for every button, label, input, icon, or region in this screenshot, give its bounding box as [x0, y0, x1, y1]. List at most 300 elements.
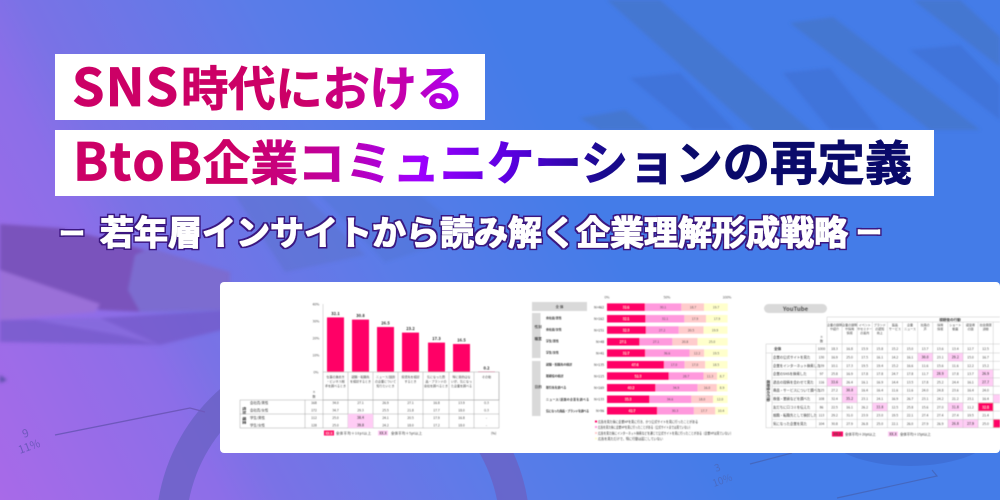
table values: 17.8	[861, 371, 868, 376]
table values: 26.8	[861, 421, 868, 426]
table values: 116	[819, 379, 824, 384]
table values: 13.7	[967, 371, 974, 376]
table values: 23.1	[922, 396, 929, 401]
stacked rows: N=151	[594, 327, 604, 332]
table legend: XX.X	[326, 430, 332, 436]
table rows: 27.1	[357, 400, 364, 405]
category labels	[312, 374, 491, 398]
stacked rows: N=462	[594, 304, 604, 309]
table values: 16.4	[967, 388, 974, 393]
table values: 113	[819, 413, 824, 418]
stacked rows: N=115	[594, 373, 604, 378]
table legend: 全体平均＋5pt以上	[391, 430, 423, 436]
column heading: 採用	[937, 322, 943, 327]
table values: 16.1	[907, 354, 913, 360]
row labels: 株価・業績などを調べた	[773, 396, 811, 401]
table grid	[766, 317, 1000, 428]
percent axis: 100%	[723, 294, 731, 300]
table values: 17.8	[907, 371, 913, 376]
stacked rows: 学生/男性	[546, 338, 559, 343]
bar value labels: 26.5	[381, 320, 390, 326]
table values: 16.8	[846, 346, 853, 351]
table values: 13.7	[922, 346, 929, 351]
category labels: 特に目的はな	[452, 374, 471, 379]
stacked rows: ニュース/話題の企業を調べる	[546, 396, 589, 402]
table values: 24.4	[952, 379, 959, 384]
column heading: 製品	[892, 322, 898, 327]
table legend: XX.X	[379, 430, 388, 436]
category labels: 就職・転職先	[351, 374, 370, 379]
table rows: 25.5	[382, 408, 389, 412]
table values: 24.8	[937, 388, 944, 393]
table values: 18.3	[831, 346, 838, 351]
table values: 12.2	[967, 363, 974, 368]
stacked rows: 36.6	[664, 350, 670, 355]
table values: 24.7	[892, 371, 898, 376]
table rows: 34.7	[332, 408, 339, 412]
stacked rows: N=96	[596, 408, 604, 413]
category labels: 知りたいとき	[376, 383, 395, 388]
white report panel	[220, 282, 1000, 453]
stacked rows: 31.7	[623, 350, 629, 355]
stacked rows: 28.7	[683, 373, 689, 378]
table values: 1000	[818, 346, 825, 351]
table values: 32.4	[831, 396, 838, 401]
table values: 16.1	[967, 379, 974, 384]
stacked rows: 就職・転職先の検討	[546, 362, 572, 366]
table grid	[240, 372, 499, 428]
table rows: 39.8	[357, 422, 364, 428]
y axis and labels: 0%	[313, 370, 319, 374]
category labels: 品・ブランドの	[425, 378, 447, 384]
stacked chart legend: 広告を見ただけで、特に行動は起こしていない	[598, 436, 664, 441]
stacked rows: 32.1	[623, 316, 629, 321]
group label text: 職業	[534, 336, 542, 342]
table rows: -	[486, 422, 488, 428]
stacked bar chart: action by purpose	[532, 294, 733, 441]
table values: 10.1	[831, 363, 838, 368]
stacked rows: 12.0	[717, 396, 723, 402]
table legend	[324, 430, 496, 436]
category labels: 仕事の進め方	[326, 374, 345, 379]
category labels: 投資先を検討	[401, 374, 420, 379]
stacked rows: 17.0	[671, 362, 677, 367]
heat table legend	[832, 432, 931, 436]
column heading: やセミナー	[857, 326, 872, 331]
column heading: n	[821, 335, 823, 339]
table highlights	[348, 414, 373, 428]
table values: 31.8	[952, 404, 959, 409]
YouTube pill heading: YouTube	[782, 304, 809, 313]
table values: 15.6	[937, 363, 944, 368]
stacked rows: 41.7	[629, 408, 635, 413]
column heading: イベント	[859, 323, 871, 327]
table values: 16.9	[831, 354, 838, 360]
table values: 21.4	[982, 413, 989, 418]
column heading: ニュース	[904, 326, 916, 331]
table values: 30.8	[846, 388, 853, 393]
category labels: を検討するとき	[350, 378, 371, 384]
category labels: ・ビジネス相	[326, 378, 345, 384]
category labels: するとき	[404, 378, 417, 384]
bar value labels	[331, 311, 490, 372]
group label text: 全 体	[555, 304, 564, 310]
table rows: 学生/女性	[250, 422, 266, 428]
table rows: 18.0	[407, 422, 414, 428]
table rows: 29.3	[357, 408, 364, 412]
table rows: 17.9	[433, 415, 440, 420]
table values: 32.8	[982, 404, 989, 409]
table values: 27.0	[937, 404, 944, 409]
y axis and labels: 30%	[313, 318, 319, 324]
table values: 27.9	[922, 421, 929, 426]
row labels: 企業の公式サイトを見た	[773, 354, 811, 360]
table rows: 会社員/女性	[250, 408, 269, 412]
bar value labels: 0.2	[483, 366, 490, 372]
table values: 11.6	[952, 363, 959, 368]
column heading: 活動	[983, 326, 989, 331]
table values: 35.2	[846, 396, 853, 401]
column heading: 経営者	[966, 322, 975, 327]
row labels: 就職・転職先として検討した	[773, 413, 818, 418]
table values: 27.7	[982, 379, 989, 384]
table values: 28.9	[937, 371, 944, 376]
table values: 13.5	[907, 379, 913, 384]
table values: 19.5	[892, 413, 898, 418]
table values: 26.7	[907, 396, 913, 401]
table legend: 全体平均＋10pt以上	[336, 430, 372, 436]
title line 2: 企業コミュニケーションの再定義	[203, 126, 912, 194]
side label: 視聴後の行動	[765, 380, 771, 402]
y axis and labels: 40%	[313, 302, 319, 306]
background photo: pencils on the left	[0, 224, 230, 383]
table values: 30.8	[831, 421, 838, 426]
title line 2: BtoB	[73, 120, 204, 196]
stacked rows	[546, 303, 728, 414]
category labels: の企業について	[375, 378, 396, 384]
column heading: 社員の	[921, 322, 930, 327]
category labels: その他	[482, 374, 491, 379]
bar value labels: 16.5	[457, 338, 466, 344]
YouTube pill heading	[764, 304, 827, 313]
column heading: 企業の説明	[842, 322, 857, 327]
table values: 16.4	[982, 396, 989, 401]
table values: 130	[819, 354, 824, 360]
stacked rows: 10.4	[718, 408, 724, 413]
table values: 19.4	[877, 363, 883, 368]
stacked rows: 30.3	[672, 408, 678, 413]
column heading: 数	[820, 338, 823, 343]
stacked rows: 30.1	[660, 304, 666, 309]
column heading: 企業の説明	[827, 322, 842, 327]
table values: 14.4	[892, 379, 898, 384]
bar value labels: 32.1	[331, 311, 340, 317]
row labels	[773, 346, 821, 426]
subtitle: ー	[856, 213, 882, 250]
background photo: pie chart ring and lines	[16, 343, 995, 500]
column heading: 企業	[907, 322, 913, 327]
stacked rows: 気になった商品・ブランドを調べる	[546, 408, 589, 413]
row labels: 友だちに口コミを伝えた	[773, 404, 811, 409]
stacked rows: 34.6	[667, 396, 673, 402]
column heading: や採用	[845, 326, 854, 331]
table rows: 172	[311, 408, 317, 412]
table values: 97	[820, 371, 823, 376]
table rows: 24.2	[382, 422, 389, 428]
stacked rows: 25.0	[709, 339, 715, 344]
table values: 17.3	[846, 363, 853, 368]
table values: 24.0	[922, 388, 929, 393]
background photo: pie chart ring and lines: 9	[20, 425, 31, 442]
title line 1	[55, 46, 485, 121]
table values: 23.1	[861, 396, 868, 401]
background photo: pie chart ring and lines: 3	[712, 459, 722, 475]
table values: 26.9	[982, 371, 989, 376]
table values: 29.2	[952, 354, 959, 360]
table values: 16.9	[877, 379, 883, 384]
table values	[818, 346, 989, 426]
table values: 15.2	[892, 363, 898, 368]
stacked rows: 17.7	[701, 408, 707, 413]
column heading: 情報	[847, 330, 853, 335]
stacked chart legend	[595, 419, 733, 441]
table values: 23.6	[952, 388, 959, 393]
stacked rows: 8.9	[720, 385, 724, 390]
column heading: 声	[924, 326, 927, 331]
table rows: -	[486, 415, 488, 420]
group label blocks	[532, 302, 587, 416]
table values: 24.2	[937, 396, 944, 401]
group label text: 性別	[534, 324, 542, 330]
stacked rows: 47.4	[632, 362, 638, 367]
stacked rows: 51.3	[635, 373, 641, 378]
heat table legend: 全体平均＋20pt以上	[845, 432, 876, 436]
table rows: 学生/男性	[250, 415, 266, 420]
table values: 16.1	[846, 404, 853, 409]
table values: 108	[819, 396, 824, 401]
stacked rows: 会社員/男性	[546, 315, 562, 320]
table values: 16.9	[892, 396, 898, 401]
table values: 25.0	[846, 354, 853, 360]
category labels: n	[313, 390, 315, 394]
table values: 27.4	[952, 413, 959, 418]
table rows: 職業	[241, 417, 247, 425]
table values: 14.2	[892, 354, 898, 360]
row labels: 商品・サービスについて調べた	[773, 388, 821, 393]
table values: 13.6	[937, 346, 944, 351]
column heading: の話	[967, 326, 974, 331]
column heading: や紹介	[830, 326, 839, 331]
table values: 17.8	[952, 371, 959, 376]
column heading: サービス	[889, 326, 901, 331]
table values: 11.7	[922, 371, 929, 376]
heat table legend: XX.X	[889, 432, 898, 436]
table values: 16.1	[861, 379, 868, 384]
table rows: 24.1	[382, 415, 389, 420]
table values: 23.1	[937, 354, 944, 360]
table values: 25.8	[907, 404, 913, 409]
stacked rows: 20.5	[688, 327, 694, 332]
group label text	[534, 304, 564, 390]
table values: 27.4	[922, 413, 929, 418]
stacked rows: 11.3	[707, 373, 713, 378]
table values: 86	[820, 404, 823, 409]
table values: 22.5	[831, 404, 838, 409]
bar chart: purposes of information search	[240, 302, 499, 436]
table values: 125	[819, 388, 824, 393]
bar value labels: 23.2	[406, 326, 415, 332]
table values: 23.0	[877, 413, 883, 418]
table rows: 性別	[241, 407, 247, 415]
heat table: YouTube	[764, 304, 1000, 436]
table values: 15.2	[982, 363, 989, 368]
table rows: 16.8	[433, 400, 440, 405]
table rows: 13.9	[458, 400, 465, 405]
row labels: 企業のSNSを検索した	[773, 371, 807, 376]
table values: 26.0	[907, 421, 913, 426]
stacked rows: 取締役の検討	[546, 373, 563, 378]
table values: 31.0	[846, 413, 853, 418]
y axis and labels: 10%	[313, 352, 319, 358]
table values: 29.2	[831, 413, 838, 418]
stacked rows: 16.0	[704, 385, 710, 390]
stacked rows: 19.9	[712, 327, 718, 332]
stacked rows: N=162	[594, 316, 604, 321]
y axis and labels	[313, 302, 323, 374]
table rows: 0.3	[484, 400, 489, 405]
table values: 11.6	[922, 363, 929, 368]
category labels: た企業を調べる	[451, 383, 472, 388]
table rows: 168	[311, 400, 317, 405]
table values: 11.6	[892, 388, 898, 393]
table values: 15.6	[922, 404, 929, 409]
bar value labels: 17.3	[432, 336, 441, 342]
percent axis: 0%	[604, 294, 610, 300]
column heading: 向上	[877, 330, 883, 335]
subtitle: ー	[59, 214, 85, 251]
stacked rows: 19.7	[713, 304, 719, 309]
highlighted cells	[827, 353, 1000, 428]
table rows: 0.3	[484, 408, 489, 412]
category labels: 数	[312, 394, 316, 398]
category labels: ニュース/話題	[376, 374, 395, 379]
category labels: いが、気になっ	[451, 378, 472, 384]
table values: 21.2	[952, 396, 959, 401]
stacked rows: 27.1	[653, 339, 659, 344]
stacked rows: 27.1	[620, 339, 626, 344]
table values: 17.8	[877, 371, 883, 376]
table rows: 18.0	[458, 408, 465, 412]
stacked rows: N=133	[594, 396, 604, 402]
heat table legend: 全体平均＋15pt以上	[900, 432, 931, 436]
table values: 104	[819, 421, 824, 426]
table values: 16.6	[907, 363, 913, 368]
table values: 25.0	[877, 421, 883, 426]
percent axis	[604, 294, 731, 300]
table values: 33.6	[831, 379, 838, 384]
stacked rows: 18.5	[713, 362, 719, 367]
table rows: 会社員/男性	[250, 400, 269, 405]
background photo: faded chart stripes	[235, 0, 1000, 272]
stacked rows: N=169	[594, 385, 604, 390]
table rows: 38.4	[357, 415, 364, 420]
column heading: ショート	[949, 323, 961, 327]
row labels: 過去の投稿を合わせて見た	[773, 379, 814, 384]
table values: 139	[819, 363, 824, 368]
table values: 27.9	[967, 421, 974, 426]
group label text: 目的	[534, 384, 542, 390]
table rows: 20.5	[407, 415, 414, 420]
table rows: 25.0	[332, 415, 339, 420]
stacked rows: 18.0	[699, 396, 705, 402]
table values: 23.9	[861, 413, 868, 418]
table values: 33.8	[876, 404, 883, 409]
table rows: 26.9	[382, 400, 389, 405]
table rows: 25.0	[332, 422, 339, 428]
column heading: 情報	[937, 326, 943, 331]
pink bars	[327, 317, 495, 372]
table values: 19.5	[967, 413, 974, 418]
column heading: 社会貢献	[980, 322, 992, 327]
heat table legend: XX.X	[834, 432, 842, 436]
stacked rows: N=41	[596, 350, 604, 355]
title line 1: SNS	[72, 46, 179, 121]
table values: 25.0	[982, 421, 989, 426]
table values: 26.2	[861, 404, 868, 409]
top-scoring red cells	[978, 403, 1000, 428]
column heading: の認知	[875, 326, 884, 331]
table values: 17.8	[922, 379, 929, 384]
stacked rows: 19.5	[713, 350, 719, 355]
table rows: 21.8	[407, 408, 414, 412]
stacked rows: 32.3	[623, 327, 629, 332]
table rows: 17.7	[433, 408, 440, 412]
stacked rows: 31.6	[623, 304, 629, 309]
table values: 19.5	[861, 363, 868, 368]
y axis and labels: 20%	[313, 336, 319, 340]
table values: 16.9	[846, 371, 853, 376]
stacked rows: 27.2	[659, 327, 665, 332]
table values: 15.9	[861, 346, 868, 351]
table values: 30.0	[922, 354, 929, 360]
table values: 22.1	[907, 413, 913, 418]
stacked rows: 会社員/女性	[546, 326, 562, 332]
table values: 15.2	[892, 346, 898, 351]
stacked rows: 取引先を調べる	[546, 384, 566, 390]
category labels: 会社を調べるとき	[424, 383, 448, 388]
stacked chart legend: 広告を見た後に企業HPを見に行き、かつ公式サイトを見に行ったことがある	[598, 419, 698, 424]
stacked chart legend: 広告を見た後にインターネット検索などを通じて公式サイトを見に行ったことがある（企業HPは見ていない）	[598, 430, 733, 436]
stacked rows: 35.3	[625, 396, 631, 402]
stacked rows: 17.9	[714, 316, 720, 321]
stacked rows: 学生/女性	[546, 350, 559, 354]
column heading	[820, 317, 992, 343]
category labels: 手を調べるとき	[325, 383, 346, 388]
stacked rows: 12.2	[694, 350, 700, 355]
subtitle: 若年層インサイトから読み解く企業理解形成戦略	[100, 206, 848, 255]
category labels: 気になった商	[427, 374, 445, 379]
stacked rows: 20.8	[682, 339, 688, 344]
row labels: 全体	[774, 346, 782, 352]
table values: 12.7	[967, 346, 974, 351]
stacked rows: 18.7	[690, 304, 696, 309]
column heading: 動画	[952, 326, 958, 331]
table values: 25.2	[937, 379, 944, 384]
table values: 15.8	[877, 346, 883, 351]
table rows: 34.0	[332, 400, 339, 405]
table rows: 18.0	[458, 422, 465, 428]
table values: 11.2	[967, 404, 974, 409]
